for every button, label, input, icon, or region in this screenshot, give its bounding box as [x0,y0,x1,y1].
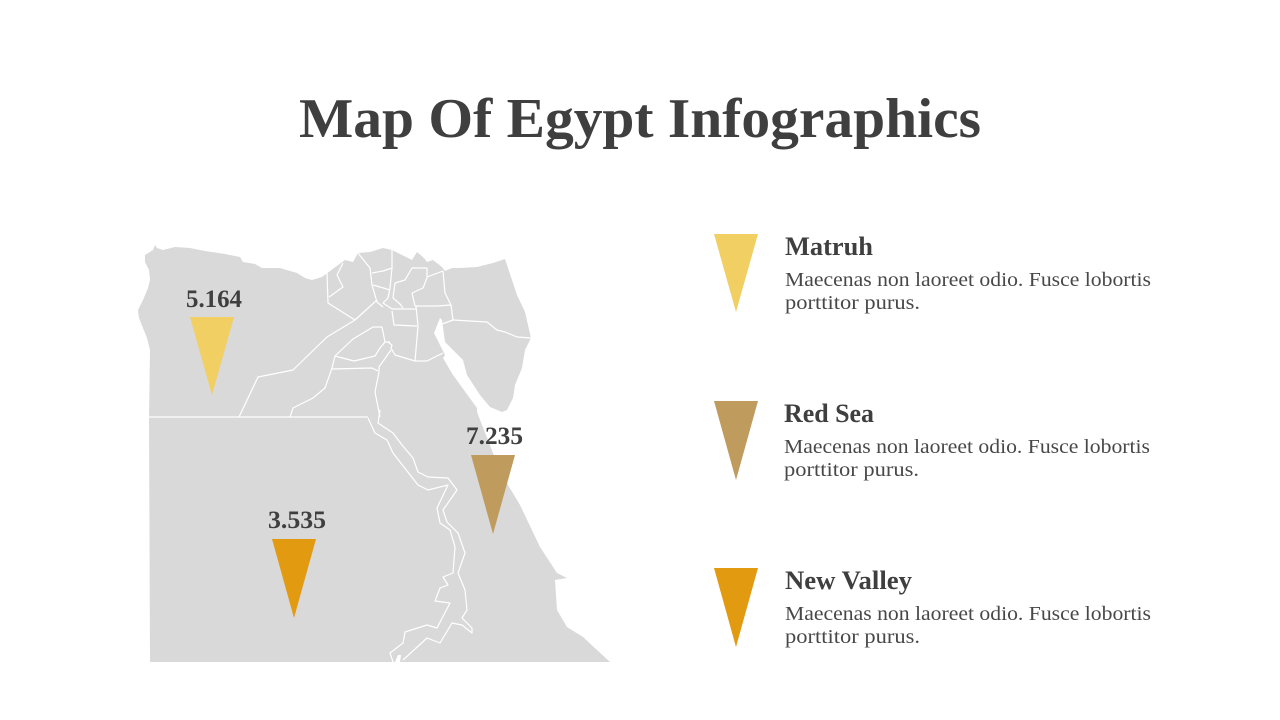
title: Map Of Egypt Infographics [299,88,981,150]
map marker: Red Sea [466,423,523,534]
map of Egypt [138,245,610,662]
legend item: Matruh [714,232,1151,314]
governorate borders [149,250,531,662]
map marker: Red Sea: 7.235 [466,423,523,450]
map marker: Matruh [186,286,242,395]
legend item: New Valley: porttitor purus. [785,626,920,648]
land silhouette [138,245,610,662]
legend item: New Valley [714,566,1151,648]
legend item: New Valley: New Valley [785,566,912,595]
legend item: Red Sea: Red Sea [784,399,874,428]
legend item: Matruh: Maecenas non laoreet odio. Fusce lobortis [785,269,1151,291]
legend item: Matruh: porttitor purus. [785,292,920,314]
map marker: Matruh: 5.164 [186,286,242,313]
legend item: Red Sea [714,399,1150,481]
southern notch [395,655,401,662]
legend item: Red Sea: Maecenas non laoreet odio. Fusce lobortis [784,436,1150,458]
legend item: New Valley: Maecenas non laoreet odio. Fusce lobortis [785,603,1151,625]
map marker: New Valley [268,507,326,618]
map marker: New Valley: 3.535 [268,507,326,534]
legend item: Red Sea: porttitor purus. [784,459,919,481]
legend item: Matruh: Matruh [785,232,874,261]
